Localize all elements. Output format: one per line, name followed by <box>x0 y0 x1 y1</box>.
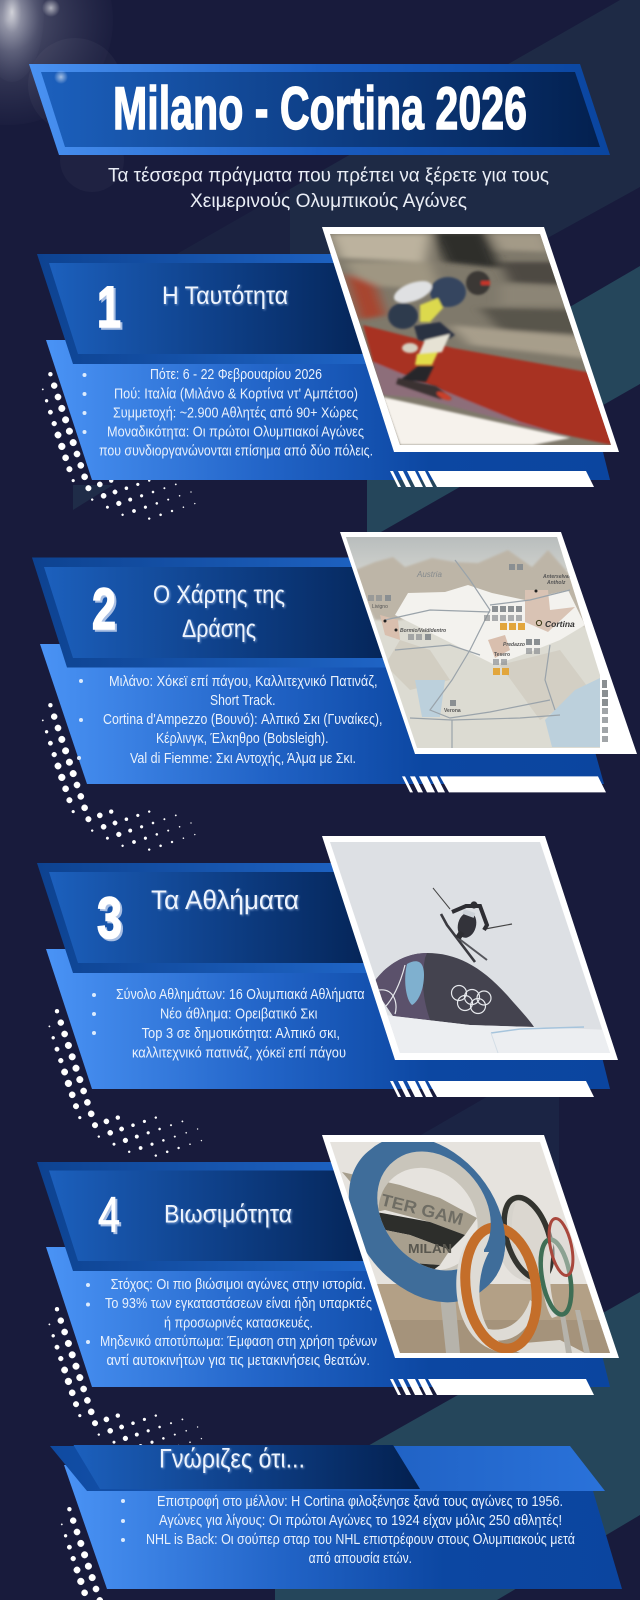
body text 4: Μηδενικό αποτύπωμα: Έμφαση στη χρήση τρένων <box>100 1334 377 1350</box>
header band 5 <box>50 1445 605 1491</box>
body text 2: Short Track. <box>210 693 276 709</box>
body text 2: Cortina d'Ampezzo (Βουνό): Αλπικό Σκι (Γυναίκες), <box>103 712 382 728</box>
heading 1: Η Ταυτότητα <box>162 282 288 310</box>
heading 5: Γνώριζες ότι... <box>159 1443 305 1473</box>
section 3: sports <box>37 836 620 1097</box>
photo 3: freestyle skier <box>320 836 620 1060</box>
body text 2 <box>103 674 382 767</box>
header panel 2 <box>32 558 420 668</box>
body text 4: Το 93% των εγκαταστάσεων είναι ήδη υπαρκτές <box>105 1296 372 1312</box>
body panel 1 <box>46 340 610 480</box>
bullets 5 <box>121 1499 125 1542</box>
body text 2: Μιλάνο: Χόκεϊ επί πάγου, Καλλιτεχνικό Πατινάζ, <box>109 674 378 690</box>
body panel 4 <box>46 1247 610 1387</box>
photo 2: map: Bormio/Valdidentro <box>400 628 446 634</box>
body text 1: Μοναδικότητα: Οι πρώτοι Ολυμπιακοί Αγώνες <box>107 425 364 441</box>
body text 5 <box>146 1494 575 1567</box>
white stripe bar 1 <box>390 471 594 487</box>
body text 3: Top 3 σε δημοτικότητα: Αλπικό σκι, <box>142 1026 340 1042</box>
body text 3: Σύνολο Αθλημάτων: 16 Ολυμπιακά Αθλήματα <box>116 987 364 1003</box>
body panel 2 <box>40 644 604 784</box>
subtitle: Χειμερινούς Ολυμπικούς Αγώνες <box>190 190 467 212</box>
title banner <box>29 64 610 155</box>
heading 2 <box>153 581 285 643</box>
photo 4: olympic rings <box>320 1135 620 1359</box>
body text 4: αντί αυτοκινήτων για τις μετακινήσεις θεατών. <box>106 1353 370 1369</box>
section 1: identity <box>37 227 620 487</box>
photo 2: map: Austria <box>416 570 442 579</box>
header panel 4 <box>37 1162 395 1271</box>
heading 4: Βιωσιμότητα <box>164 1201 292 1229</box>
white stripe bar 2 <box>402 776 606 792</box>
bullets 1 <box>82 373 86 434</box>
subtitle <box>108 164 549 212</box>
number 2: 2 <box>92 577 116 642</box>
bullets 3 <box>92 993 96 1035</box>
section 4: sustainability <box>37 1135 620 1395</box>
body text 1: Πότε: 6 - 22 Φεβρουαρίου 2026 <box>150 367 322 383</box>
body text 2: Val di Fiemme: Σκι Αντοχής, Άλμα με Σκι. <box>130 751 356 767</box>
number 1: 1 <box>97 275 121 340</box>
photo 4: olympic rings: TER GAM <box>379 1190 465 1229</box>
body text 3 <box>116 987 364 1062</box>
body text 1: που συνδιοργανώνονται επίσημα από δύο πόλεις. <box>99 444 373 460</box>
subtitle: Τα τέσσερα πράγματα που πρέπει να ξέρετε για τους <box>108 164 549 186</box>
photo 2: map: Antholz <box>546 580 566 586</box>
lens flare <box>0 0 124 192</box>
body text 2: Κέρλινγκ, Έλκηθρο (Bobsleigh). <box>156 731 328 747</box>
header panel 1 <box>37 254 395 364</box>
photo 2: map: Predazzo <box>503 642 525 648</box>
body text 4: Στόχος: Οι πιο βιώσιμοι αγώνες στην ιστορία. <box>111 1277 366 1293</box>
body text 1: Συμμετοχή: ~2.900 Αθλητές από 90+ Χώρες <box>113 406 358 422</box>
photo 2: map: Verona <box>444 708 461 714</box>
photo 2: map: Anterselva/ <box>542 574 571 580</box>
number 3: 3 <box>97 886 122 951</box>
body text 1: Πού: Ιταλία (Μιλάνο & Κορτίνα ντ' Αμπέτσο) <box>114 386 358 402</box>
body text 4 <box>100 1277 377 1369</box>
photo 2: map: Livigno <box>372 604 388 610</box>
heading 3: Τα Αθλήματα <box>151 885 299 915</box>
bullets 2 <box>77 679 83 760</box>
heading 2: Δράσης <box>182 615 256 643</box>
body text 5: NHL is Back: Οι σούπερ σταρ του NHL επιστρέφουν στους Ολυμπιακούς μετά <box>146 1532 575 1548</box>
body panel 3 <box>46 949 610 1089</box>
number 4: 4 <box>98 1187 120 1243</box>
photo 2: map: Tesero <box>494 652 510 658</box>
body text 1 <box>99 367 373 460</box>
photo 2: map: Cortina <box>545 619 575 629</box>
body text 5: Αγώνες για λίγους: Οι πρώτοι Αγώνες το 1924 είχαν μόλις 250 αθλητές! <box>159 1513 562 1529</box>
body text 4: ή προσωρινές κατασκευές. <box>164 1315 313 1331</box>
heading 2: Ο Χάρτης της <box>153 581 285 609</box>
photo 1: skier <box>320 227 620 452</box>
body text 3: καλλιτεχνικό πατινάζ, χόκεϊ επί πάγου <box>132 1046 346 1062</box>
body text 3: Νέο άθλημα: Ορειβατικό Σκι <box>160 1007 318 1023</box>
body panel 5 <box>64 1465 622 1589</box>
section 2: map <box>32 532 637 792</box>
body text 5: από απουσία ετών. <box>309 1551 412 1567</box>
photo 4: olympic rings: MILAN <box>408 1241 452 1256</box>
bullets 4 <box>86 1283 90 1344</box>
white stripe bar 3 <box>390 1081 594 1097</box>
photo 2: map <box>340 532 637 754</box>
header panel 3 <box>37 863 395 973</box>
halftone dots, all sections <box>42 372 214 1600</box>
section 5: did you know <box>50 1443 622 1589</box>
body text 5: Επιστροφή στο μέλλον: Η Cortina φιλοξένησε ξανά τους αγώνες το 1956. <box>157 1494 563 1510</box>
white stripe bar 4 <box>390 1379 594 1395</box>
